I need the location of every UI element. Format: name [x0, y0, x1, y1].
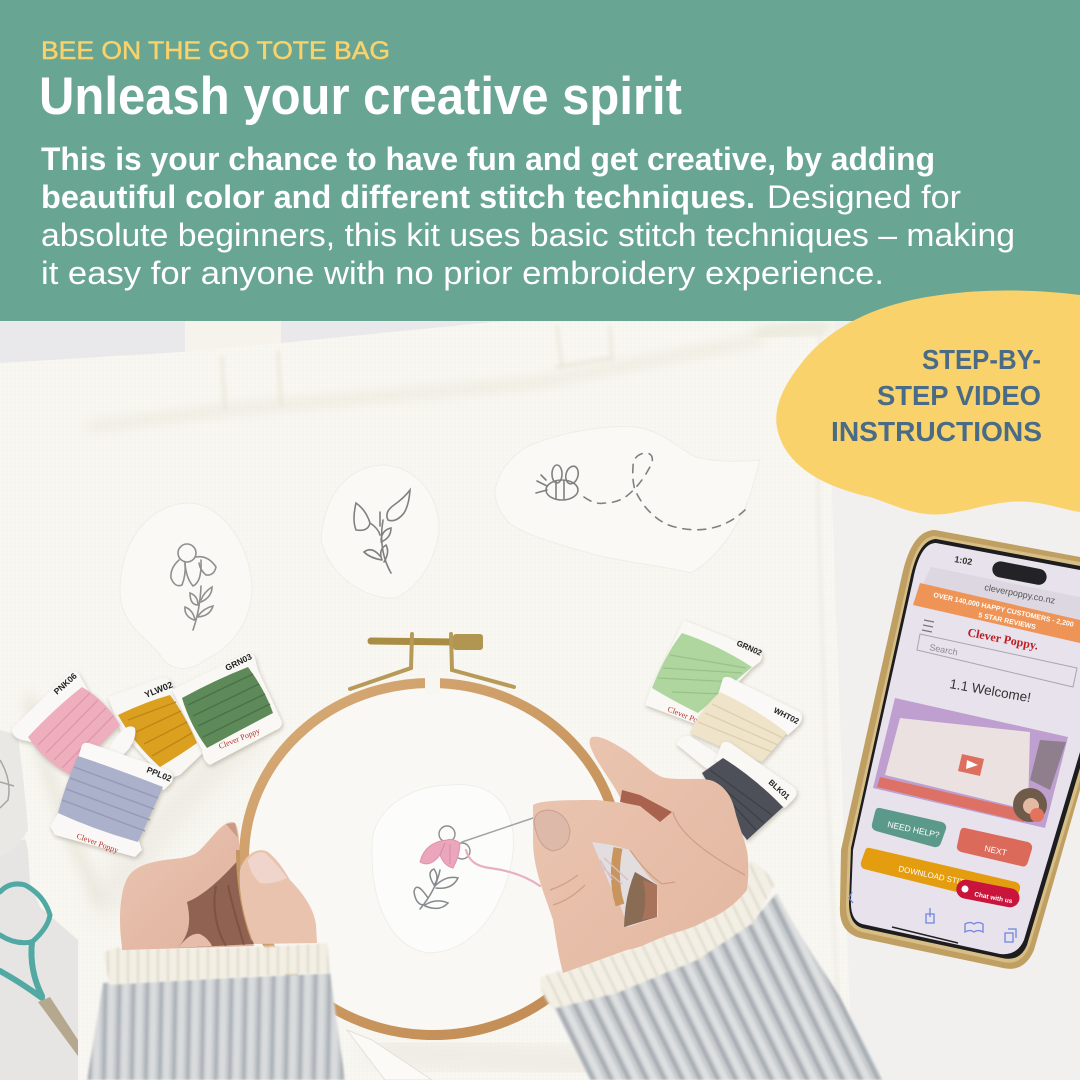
phone need help button: NEED HELP? [887, 819, 941, 840]
gap below fingers [592, 842, 658, 927]
green thread card GRN03: GRN03 [223, 651, 254, 673]
callout: step-by-step video instructions [776, 290, 1080, 514]
right hand [533, 737, 748, 973]
needle and pink thread [462, 817, 540, 886]
left edge patch [0, 730, 28, 856]
eyebrow: BEE ON THE GO TOTE BAG [41, 37, 390, 65]
phone download button: DOWNLOAD STITCH GUIDE [898, 864, 1003, 895]
patch: flower stitch design [321, 465, 439, 598]
title: Unleash your creative spirit [39, 67, 682, 126]
photo background: table surface [0, 321, 1080, 1080]
right sleeve [540, 860, 883, 1080]
body copy: absolute beginners, this kit uses basic stitch techniques – making [41, 217, 1015, 253]
phone screen [851, 543, 1080, 954]
hoop brass screw and brackets [350, 634, 514, 689]
gap between fingers [178, 858, 254, 948]
hoop fabric [237, 676, 627, 1042]
callout: step-by-step video instructions: INSTRUCTIONS [831, 416, 1042, 447]
icon: daisy outline [171, 544, 216, 630]
icon: grey stem and leaves [414, 869, 458, 909]
thumbnail [248, 852, 287, 883]
phone next button: NEXT [984, 843, 1008, 858]
embroidery hoop [235, 634, 629, 1045]
phone logo and search box: Search [929, 642, 959, 657]
phone orange banner: OVER 140,000 HAPPY CUSTOMERS - 2,200 [933, 592, 1074, 629]
finger creases [550, 812, 745, 905]
fingernail [534, 810, 570, 851]
smartphone [840, 530, 1080, 969]
body copy: beautiful color and different stitch techniques. [41, 179, 755, 215]
phone status and address bar [920, 554, 1080, 622]
icon: pink stitched flower [414, 826, 470, 909]
phone video thumbnail [873, 698, 1068, 828]
header band [0, 0, 1080, 321]
hoop wooden ring [235, 673, 629, 1045]
charcoal thread card BLK01 [702, 742, 797, 840]
green thread card GRN03 [172, 651, 282, 765]
body copy [41, 141, 1015, 291]
tote bag [0, 321, 885, 1080]
charcoal thread card BLK01: BLK01 [767, 778, 792, 802]
phone gold case [840, 530, 1080, 969]
phone need help button [872, 808, 946, 847]
purple thread card PPL02: PPL02 [145, 765, 173, 784]
scissors [0, 884, 78, 1056]
bag handles [185, 321, 281, 355]
thread cards: right group [645, 620, 802, 840]
phone logo and search box [917, 620, 1077, 687]
phone status and address bar: cleverpoppy.co.nz [984, 582, 1057, 606]
icon: bee with dashed flight trail [536, 453, 745, 530]
phone status and address bar: 1:02 [954, 554, 973, 567]
left sleeve [87, 943, 345, 1080]
body copy: it easy for anyone with no prior embroidery experience. [41, 255, 884, 291]
bag body [0, 322, 885, 1080]
phone home indicator [892, 927, 958, 943]
pink thread card PNK06: PNK06 [52, 671, 79, 696]
phone browser toolbar icons [849, 892, 1016, 942]
phone orange banner [913, 583, 1080, 643]
phone logo and search box: Clever Poppy. [966, 625, 1040, 653]
left thumb [240, 850, 317, 944]
left cuff [103, 943, 330, 985]
green thread card GRN03: Clever Poppy [217, 726, 261, 751]
callout: step-by-step video instructions: STEP VIDEO [877, 380, 1041, 411]
light green thread card GRN02: GRN02 [735, 639, 764, 658]
phone chat badge: Chat with us [974, 891, 1013, 905]
phone chat badge [955, 878, 1021, 909]
body copy: This is your chance to have fun and get creative, by adding [41, 141, 935, 177]
light green thread card GRN02: Clever Poppy [666, 705, 710, 729]
cream thread card WHT02 [676, 677, 802, 770]
patch: bee stitch design [495, 427, 760, 573]
patch: daisy stitch design [120, 503, 252, 668]
phone next button [957, 828, 1032, 866]
stabilizer patch with stitched flower [372, 784, 513, 953]
phone download button [861, 848, 1020, 905]
cream thread card WHT02: WHT02 [772, 706, 801, 726]
bag seam shading [30, 326, 838, 1065]
thread cards: left group [12, 651, 282, 857]
bag strap under hoop [347, 1030, 432, 1080]
purple thread card PPL02 [50, 743, 173, 857]
yellow thread card YLW02: YLW02 [143, 680, 174, 700]
pink thread card PNK06 [12, 671, 135, 775]
yellow thread card YLW02 [108, 678, 204, 780]
gap between upper fingers [620, 790, 672, 822]
phone page heading: 1.1 Welcome! [948, 676, 1032, 705]
purple thread card PPL02: Clever Poppy [75, 831, 120, 855]
icon: sprig outline [354, 490, 410, 573]
right cuff [540, 860, 775, 1009]
light green thread card GRN02 [645, 620, 764, 729]
callout: step-by-step video instructions: STEP-BY- [922, 344, 1041, 375]
phone orange banner: 5 STAR REVIEWS [978, 612, 1037, 631]
body copy: Designed for [767, 179, 961, 215]
left hand [120, 822, 317, 950]
